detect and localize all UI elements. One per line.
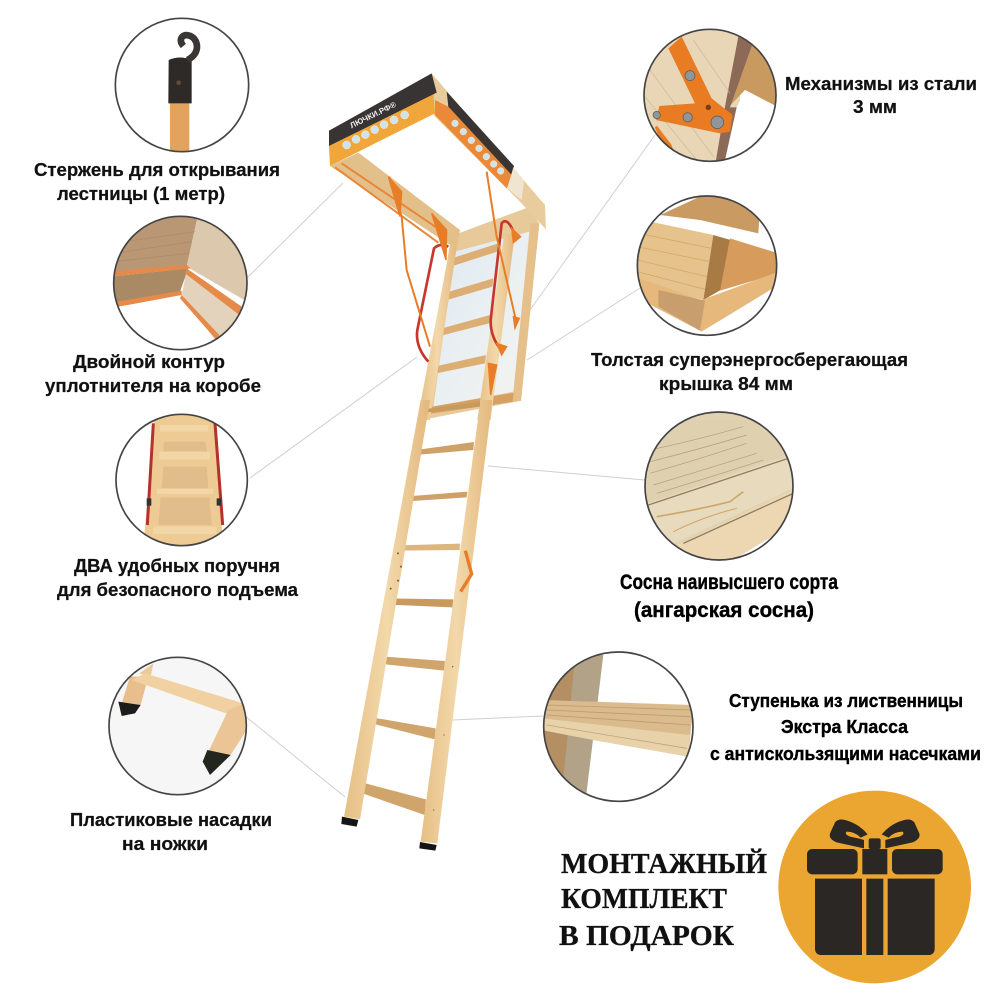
inner panels bbox=[158, 442, 212, 525]
caption: feet bbox=[70, 809, 272, 854]
caption: feet: на ножки bbox=[122, 833, 208, 854]
gift text: В ПОДАРОК bbox=[559, 921, 735, 952]
panel: steel mechanism photo bbox=[640, 27, 778, 167]
ladder: attic hatch and box bbox=[329, 73, 546, 420]
end grain bbox=[703, 235, 731, 300]
label icons bbox=[343, 111, 504, 174]
panel: seal photo bbox=[110, 213, 250, 353]
box right wall upper bbox=[187, 219, 246, 300]
right wood bbox=[731, 37, 776, 106]
upper wood piece bbox=[660, 197, 760, 233]
right face dark band bbox=[447, 92, 514, 175]
right face orange label bbox=[435, 100, 512, 188]
brand label: ЛЮЧКИ.РФ® bbox=[349, 100, 398, 130]
lower right rail bbox=[421, 400, 492, 843]
grain bbox=[547, 705, 690, 748]
right face end label bbox=[507, 167, 524, 200]
panel: step photo bbox=[540, 648, 697, 805]
caption: rod bbox=[34, 159, 280, 204]
tread bbox=[542, 700, 693, 757]
black cap bbox=[168, 57, 192, 103]
caption: seal: уплотнителя на коробе bbox=[45, 375, 261, 396]
post bbox=[540, 655, 603, 805]
grain bbox=[645, 40, 730, 160]
black feet bbox=[341, 817, 437, 851]
bolts bbox=[653, 71, 724, 129]
caption: pine bbox=[620, 571, 838, 622]
caption: handrails: для безопасного подъема bbox=[57, 579, 299, 600]
lower left rail bbox=[344, 400, 430, 819]
front orange label bbox=[329, 93, 435, 166]
caption: rod: Стержень для открывания bbox=[34, 159, 280, 180]
wood board bbox=[644, 30, 740, 160]
caption: step: Ступенька из лиственницы bbox=[729, 690, 963, 711]
front dark band bbox=[329, 73, 437, 146]
right leg bbox=[208, 703, 247, 755]
caption: mechanism: Механизмы из стали bbox=[785, 73, 977, 94]
box right wall lower bbox=[182, 274, 238, 339]
caption: rod: лестницы (1 метр) bbox=[57, 183, 225, 204]
caption: pine: (ангарская сосна) bbox=[634, 599, 814, 622]
lower steps bbox=[353, 402, 480, 815]
caption: seal: Двойной контур bbox=[73, 351, 225, 372]
panel: rod photo bbox=[115, 18, 249, 157]
caption: step: с антискользящими насечками bbox=[710, 743, 981, 764]
red handrails bbox=[147, 423, 223, 525]
steps bbox=[153, 425, 217, 534]
hole bbox=[176, 80, 181, 85]
box left underside bbox=[330, 153, 460, 247]
right side bbox=[720, 238, 778, 291]
gift text: МОНТАЖНЫЙ bbox=[561, 849, 767, 880]
middle board bbox=[643, 453, 797, 548]
box left wall upper bbox=[116, 217, 197, 272]
lower board bbox=[667, 488, 797, 563]
crossbar bbox=[132, 674, 242, 714]
leader lines bbox=[245, 135, 655, 797]
panel: handrails photo bbox=[116, 413, 247, 547]
hatch steps bbox=[422, 243, 521, 415]
grain bbox=[637, 233, 712, 289]
thick block top bbox=[635, 218, 713, 300]
orange seal strips bbox=[110, 265, 242, 339]
ladder: lower section bbox=[341, 400, 492, 851]
orange straps bbox=[389, 172, 517, 347]
left rail upper bbox=[417, 243, 457, 420]
orange folding hinge bbox=[461, 551, 472, 592]
box right face bbox=[432, 73, 546, 229]
gift text bbox=[559, 849, 767, 952]
gift box bbox=[807, 820, 943, 955]
wooden rod bbox=[170, 103, 189, 157]
left leg bbox=[122, 677, 148, 705]
caption: step: Экстра Класса bbox=[781, 716, 909, 737]
hook bbox=[181, 35, 197, 60]
caption: handrails: ДВА удобных поручня bbox=[74, 555, 280, 576]
base end grain bbox=[658, 290, 705, 331]
upper board bbox=[643, 420, 797, 505]
seal strips bbox=[335, 163, 445, 243]
caption: handrails bbox=[57, 555, 299, 600]
hatch insulation panel bbox=[433, 232, 529, 407]
box left wall lower bbox=[114, 268, 188, 302]
panel: pine photo bbox=[643, 410, 797, 563]
caption: lid bbox=[591, 349, 908, 394]
white gap bbox=[725, 90, 774, 158]
grooves and grain bbox=[648, 427, 793, 543]
top leg stub bbox=[139, 663, 153, 677]
orange arms bbox=[656, 37, 733, 133]
caption: mechanism: 3 мм bbox=[853, 96, 897, 117]
ladder face bbox=[143, 413, 223, 547]
hatch right frame bbox=[513, 223, 539, 402]
rail joint bolts bbox=[390, 552, 453, 811]
caption: pine: Сосна наивысшего сорта bbox=[620, 571, 838, 594]
caption: seal bbox=[45, 351, 261, 396]
white opening bbox=[110, 295, 224, 353]
caption: feet: Пластиковые насадки bbox=[70, 809, 272, 830]
red handrails bbox=[417, 221, 517, 362]
plastic feet bbox=[118, 702, 141, 716]
hatch frame bbox=[422, 207, 539, 420]
caption: mechanism bbox=[785, 73, 977, 117]
badge circle bbox=[778, 791, 971, 983]
brackets bbox=[147, 498, 221, 506]
panel: lid photo bbox=[635, 193, 782, 340]
right rail upper bbox=[477, 233, 515, 420]
bg bbox=[110, 658, 245, 794]
caption: lid: крышка 84 мм bbox=[659, 373, 793, 394]
gift text: КОМПЛЕКТ bbox=[561, 884, 727, 915]
caption: lid: Толстая суперэнергосберегающая bbox=[591, 349, 908, 370]
dark board edge bbox=[716, 37, 753, 160]
panel: feet photo bbox=[107, 653, 250, 797]
base board bbox=[635, 272, 778, 332]
white corner bbox=[733, 522, 797, 563]
caption: step bbox=[710, 690, 981, 764]
wood grain bbox=[113, 232, 195, 262]
icon: gift bbox=[778, 791, 971, 983]
tread highlight bbox=[542, 718, 690, 757]
